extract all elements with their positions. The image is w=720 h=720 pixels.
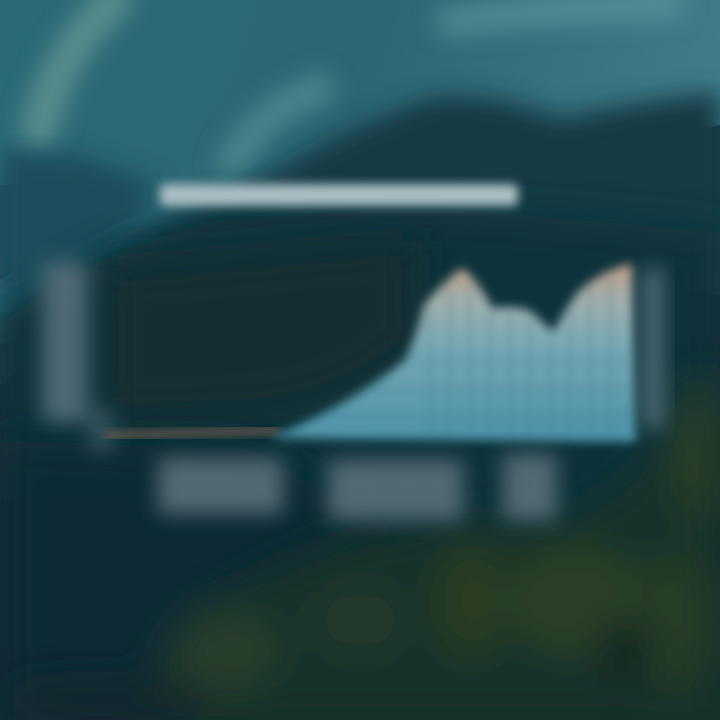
y-axis labels (illegible in reference) <box>42 262 112 450</box>
chart backdrop slope <box>105 240 415 420</box>
lower valley <box>0 440 400 720</box>
area chart <box>105 264 636 442</box>
chart area <box>270 264 636 442</box>
x-axis labels (illegible in reference) <box>158 454 557 520</box>
decorative light streaks <box>38 0 670 165</box>
forest foreground <box>0 360 720 720</box>
baseline <box>105 430 280 436</box>
chart grid <box>320 275 634 440</box>
right-side axis strip <box>642 268 664 428</box>
title (illegible in reference) <box>160 184 518 206</box>
dark mountain mass <box>0 211 720 720</box>
distant left hill <box>0 150 160 310</box>
